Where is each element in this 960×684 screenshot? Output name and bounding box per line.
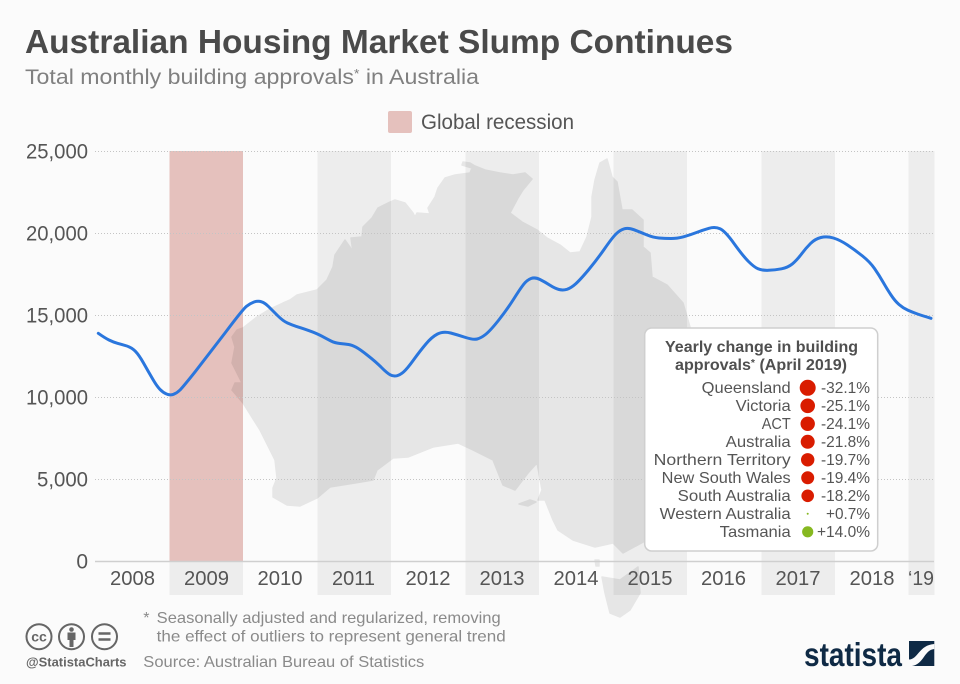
change values: -19.7%: [821, 452, 870, 469]
panel heading: [665, 339, 858, 374]
state names: South Australia: [678, 488, 791, 505]
statista logo: statista: [804, 636, 903, 673]
horizontal gridlines: [95, 152, 934, 480]
footnote: [143, 610, 506, 646]
x axis labels: 2014: [554, 568, 598, 590]
panel heading: (April 2019): [755, 357, 847, 374]
subtitle: *: [354, 66, 360, 81]
y axis labels: 25,000: [26, 140, 88, 164]
panel heading: *: [751, 358, 755, 369]
x axis labels: 2009: [184, 568, 229, 590]
map of Australia: [232, 159, 700, 617]
state names: Queensland: [702, 380, 791, 397]
state names: Northern Territory: [654, 452, 791, 469]
panel heading: Yearly change in building: [665, 339, 858, 356]
title: Australian Housing Market Slump Continues: [25, 23, 733, 60]
subtitle: in Australia: [360, 66, 479, 89]
x axis labels: 2010: [258, 568, 302, 590]
panel heading: approvals: [675, 357, 748, 374]
proportional change dots: [800, 380, 816, 537]
x axis labels: ‘19: [908, 568, 934, 590]
x axis labels: 2018: [850, 568, 894, 590]
change values: -21.8%: [821, 434, 870, 451]
x axis labels: [110, 568, 934, 590]
change values: -25.1%: [821, 398, 870, 415]
y axis labels: 10,000: [26, 386, 88, 410]
change values: [817, 380, 870, 541]
panel: yearly change by state: [645, 328, 878, 551]
handle: @StatistaCharts: [26, 656, 127, 670]
footnote: the effect of outliers to represent general trend: [157, 628, 506, 646]
state names: Victoria: [736, 398, 791, 415]
y axis labels: 5,000: [37, 468, 88, 492]
state names: Australia: [726, 434, 791, 451]
source: Source: Australian Bureau of Statistics: [143, 654, 424, 671]
icon: creative commons: [26, 624, 117, 649]
change values: -19.4%: [821, 470, 870, 487]
state names: New South Wales: [662, 470, 791, 487]
icon: creative commons: cc: [31, 628, 47, 644]
footnote: Seasonally adjusted and regularized, removing: [157, 610, 501, 627]
y axis labels: 0: [76, 550, 88, 574]
footnote: *: [143, 610, 150, 627]
x axis labels: 2017: [776, 568, 820, 590]
y axis labels: 20,000: [26, 222, 88, 246]
state names: Tasmania: [720, 524, 791, 541]
change values: +14.0%: [817, 524, 870, 541]
x axis labels: 2015: [628, 568, 672, 590]
change values: -32.1%: [821, 380, 870, 397]
state names: [654, 380, 791, 541]
state names: Western Australia: [660, 506, 791, 523]
y axis labels: [26, 140, 88, 574]
subtitle: Total monthly building approvals: [25, 66, 324, 89]
alternating year bands: [170, 151, 934, 595]
change values: -18.2%: [821, 488, 870, 505]
x axis line: [95, 560, 934, 562]
recession band 2009: [170, 151, 243, 561]
y axis labels: 15,000: [26, 304, 88, 328]
legend: global recession: Global recession: [421, 111, 574, 134]
state names: ACT: [762, 416, 791, 433]
x axis labels: 2012: [406, 568, 450, 590]
line: building approvals: [98, 228, 931, 395]
x axis labels: 2016: [701, 568, 746, 590]
change values: -24.1%: [821, 416, 870, 433]
x axis labels: 2013: [480, 568, 524, 590]
change values: +0.7%: [826, 506, 870, 523]
x axis labels: 2011: [332, 568, 375, 590]
x axis labels: 2008: [110, 568, 155, 590]
